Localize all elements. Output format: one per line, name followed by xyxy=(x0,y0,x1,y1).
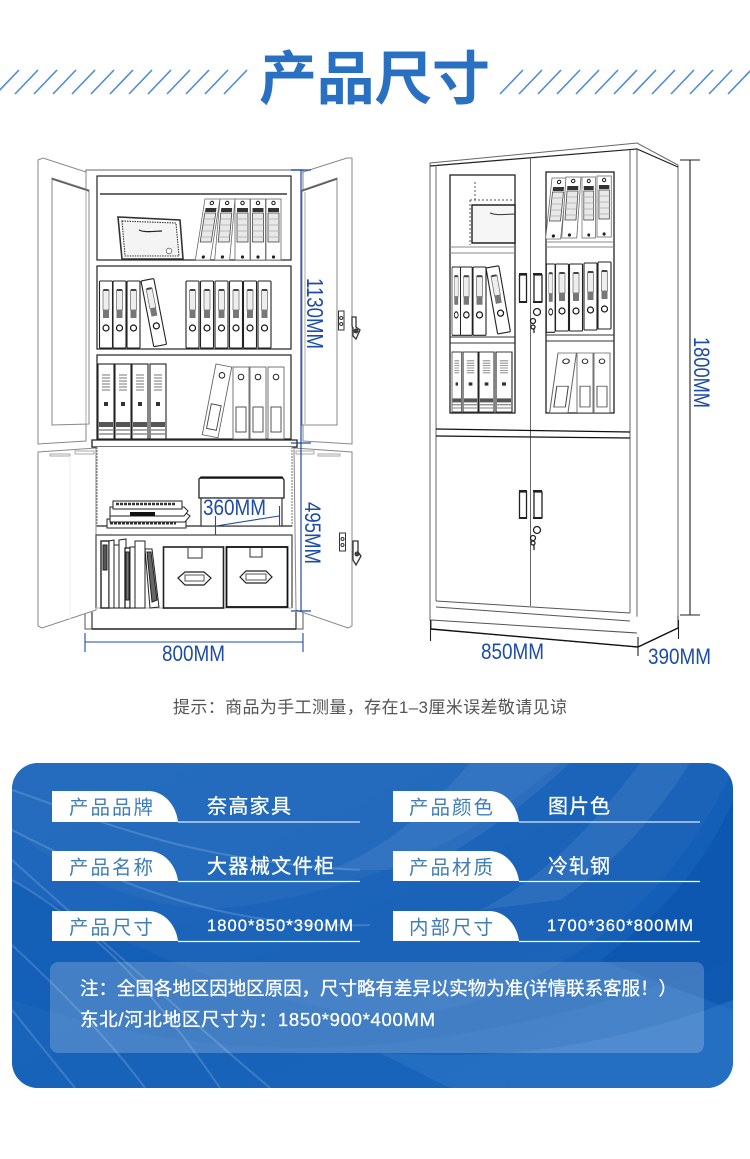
dimension: 800MM xyxy=(85,633,303,666)
row: 产品品牌 xyxy=(52,791,360,822)
certificate frame xyxy=(118,217,183,259)
handles and lock: lower xyxy=(519,491,542,550)
dimension label: 1130MM: 1130MM xyxy=(302,278,328,349)
row: 产品尺寸 xyxy=(52,911,360,942)
dimension label: 495MM: 495MM xyxy=(300,502,325,564)
storage box with lid xyxy=(199,477,284,526)
lock: lower door xyxy=(340,533,361,565)
dimension: 850MM xyxy=(430,620,638,664)
binders: second shelf xyxy=(100,279,271,348)
upper left door xyxy=(38,158,89,444)
dimension: 390MM xyxy=(648,620,711,669)
row: 产品材质: 冷轧钢 xyxy=(548,855,610,878)
binders: third shelf xyxy=(98,364,284,439)
row: 产品名称: 产品名称 xyxy=(69,857,153,879)
title: 产品尺寸 xyxy=(259,47,490,112)
row: 产品名称: 大器械文件柜 xyxy=(207,855,334,878)
row: 产品名称 xyxy=(52,851,360,882)
panel background xyxy=(12,763,733,1088)
dimension: 390MM: 390MM xyxy=(648,644,711,669)
row: 产品尺寸: 1800*850*390MM xyxy=(207,917,353,935)
dimension: 1800MM xyxy=(680,160,714,615)
row: 产品颜色 xyxy=(393,791,700,822)
hatch decoration: right of title xyxy=(500,70,750,94)
handles and lock: upper xyxy=(519,274,542,333)
row: 产品品牌: 产品品牌 xyxy=(69,797,153,819)
note box xyxy=(50,962,704,1053)
row: 产品材质: 产品材质 xyxy=(409,857,493,879)
upright books xyxy=(101,539,159,608)
hatch decoration: left of title xyxy=(0,70,247,94)
diagram: closed cabinet xyxy=(430,143,714,669)
right glass door contents xyxy=(546,172,614,413)
file box: left xyxy=(164,547,224,608)
shelf frames xyxy=(92,176,297,608)
dimension: 1130MM and 495MM line xyxy=(291,170,311,611)
binders: top shelf xyxy=(195,199,281,260)
dimension: 1800MM: 1800MM xyxy=(689,337,714,408)
file box: right xyxy=(226,547,288,607)
dimension: 360MM: 360MM xyxy=(203,495,266,520)
cabinet outer outline xyxy=(430,143,678,647)
row: 内部尺寸: 1700*360*800MM xyxy=(547,917,693,935)
stacked books xyxy=(107,501,190,528)
diagram: open cabinet xyxy=(38,158,361,666)
note box: 东北/河北地区尺寸为：1850*900*400MM xyxy=(80,1009,435,1030)
lock: upper door xyxy=(338,311,360,339)
row: 产品颜色: 图片色 xyxy=(548,795,610,818)
lower left door xyxy=(38,448,96,628)
row: 产品品牌: 奈高家具 xyxy=(207,795,291,818)
row: 内部尺寸 xyxy=(393,911,700,942)
row: 产品材质 xyxy=(393,851,700,882)
upper right door xyxy=(302,158,352,444)
cabinet body outline xyxy=(85,170,303,629)
panel: product specs xyxy=(12,763,733,1088)
row: 产品颜色: 产品颜色 xyxy=(409,797,493,819)
left glass door contents xyxy=(450,175,515,413)
measurement hint: 提示：商品为手工测量，存在1–3厘米误差敬请见谅 xyxy=(173,698,567,717)
dimension: 360MM xyxy=(203,495,280,535)
dimension: 800MM: 800MM xyxy=(162,641,225,666)
row: 产品尺寸: 产品尺寸 xyxy=(69,917,153,939)
note box: 注：全国各地区因地区原因，尺寸略有差异以实物为准(详情联系客服！） xyxy=(80,978,677,999)
lower right door xyxy=(294,448,352,628)
row: 内部尺寸: 内部尺寸 xyxy=(409,917,493,939)
dimension: 850MM: 850MM xyxy=(481,639,544,664)
